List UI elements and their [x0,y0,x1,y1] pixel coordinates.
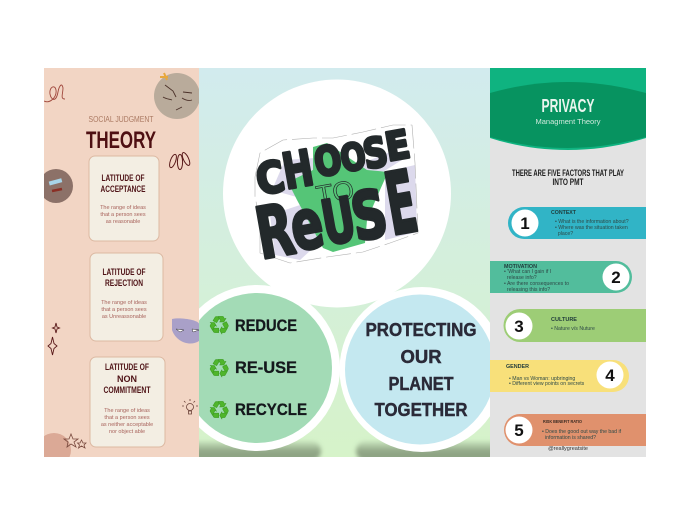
lettering: reuse: U [316,184,361,260]
factor 2: motivation: 2 [611,268,621,287]
lettering: choose: S [359,127,391,179]
factor 1: context: • What is the information about? [555,219,629,225]
row: reduce: REDUCE [235,316,297,335]
panel: center [199,68,490,457]
factor 5: risk benefit ratio [504,414,646,446]
card: latitude of acceptance: The range of ideas [100,205,146,211]
circle: protecting our planet together: OUR [400,346,442,367]
lettering: reuse: E [378,152,424,256]
icon: pink face and stars [44,433,87,457]
lettering: reuse: e [284,183,329,268]
lettering: choose: C [252,152,288,206]
icon: leaves [168,152,191,170]
intro text [512,170,624,185]
row: recycle: RECYCLE [235,400,307,419]
factor 4: gender [490,360,629,392]
shadows under circles [199,440,490,457]
row: recycle [210,401,307,420]
intro text: INTO PMT [552,177,584,187]
lettering: choose: O [311,137,345,187]
factor 4: gender: GENDER [506,364,529,370]
row: re-use: RE-USE [235,358,297,377]
icon: purple face [172,318,199,344]
panel: privacy management theory [490,68,646,457]
card: latitude of non commitment: The range of ideas [104,408,150,414]
card: latitude of non commitment: NON [117,374,137,384]
factor 2: motivation: • Are there consequences to [504,281,569,287]
header band [490,68,646,150]
factor 1: context: place? [555,231,573,237]
lettering: choose: O [337,134,369,181]
lavender blob [270,150,417,260]
factor 2: motivation: MOTIVATION [504,264,537,270]
factor 1: context [508,207,646,239]
card: latitude of non commitment: LATITUDE OF [105,362,149,372]
lettering: reuse: R [250,188,300,276]
card: latitude of acceptance: as reasonable [106,219,140,225]
circle: protecting our planet together [340,287,504,452]
intro text: THERE ARE FIVE FACTORS THAT PLAY [512,168,624,178]
card: latitude of rejection: LATITUDE OF [102,267,146,277]
factor 2: motivation: releasing this info? [504,287,550,293]
factor 5: risk benefit ratio: • Does the good out way the bad if [542,429,622,435]
row: recycle: ♻ [208,396,230,425]
card: latitude of acceptance: LATITUDE OF [102,173,145,183]
heading: theory: THEORY [86,127,156,154]
green blob [288,143,388,252]
factor 1: context: • Where was the situation taken [555,225,628,231]
circle: protecting our planet together: PROTECTING [366,319,476,340]
factor 4: gender: • Different view points on secrets [509,381,585,387]
subheading: Managment Theory [536,117,601,126]
handle: @reallygreatsite [548,446,588,452]
factor 2: motivation: • 'What can I gain if I [504,269,551,275]
factor 5: risk benefit ratio: information is shared? [545,435,596,441]
card: latitude of rejection: The range of ideas [101,300,147,306]
factor 3: culture: • Nature v/s Nuture [551,326,595,332]
lettering: choose: H [278,139,318,201]
card: latitude of non commitment: nor object able [109,429,145,435]
factor 4: gender: • Man vs Woman: upbringing [509,376,575,382]
factor 2: motivation: release info? [504,275,537,281]
card: latitude of non commitment: as neither acceptable [101,422,153,428]
card: latitude of rejection [90,253,163,341]
row: reduce: ♻ [208,311,230,340]
card: latitude of rejection: REJECTION [105,278,143,288]
card: latitude of non commitment [90,357,165,447]
lettering: choose [256,128,410,194]
lettering: choose: E [382,122,413,171]
row: re-use [210,359,296,378]
card: latitude of acceptance: ACCEPTANCE [100,184,146,194]
card: latitude of non commitment: COMMITMENT [104,385,151,395]
icon: bandaged face [44,169,73,203]
factor 4: gender: 4 [605,366,615,385]
icon: light bulb [182,399,198,414]
factor 5: risk benefit ratio: 5 [514,421,524,440]
circle: reduce reuse recycle [199,285,340,451]
card: latitude of rejection: as Unreassonable [102,314,146,320]
icon: beige face [154,73,200,119]
card: latitude of acceptance [89,156,159,241]
card: latitude of non commitment: that a person sees [104,415,150,421]
row: re-use: ♻ [208,354,230,383]
factor 3: culture: 3 [514,317,524,336]
factor 2: motivation [490,261,632,293]
dashed sticker outline [255,125,418,263]
factor 1: context: 1 [520,214,530,233]
factor 3: culture [504,309,646,342]
lettering: reuse [255,167,418,260]
decoration: squiggle [44,85,65,102]
lettering: reuse: S [345,175,393,257]
row: reduce [210,316,297,334]
card: latitude of rejection: that a person sees [101,307,147,313]
circle: protecting our planet together: TOGETHER [374,399,468,420]
card: latitude of acceptance: that a person sees [100,212,146,218]
icon: sparkles [48,323,60,355]
factor 1: context: CONTEXT [551,210,577,216]
factor 5: risk benefit ratio: RISK BENEFIT RATIO [543,419,582,425]
heading: social judgment: SOCIAL JUDGMENT [88,115,154,124]
circle: protecting our planet together: PLANET [388,373,454,394]
factor 3: culture: CULTURE [551,317,577,323]
heading: privacy: PRIVACY [542,96,594,116]
lettering: to: TO [314,175,356,211]
panel: social judgment theory [37,68,200,467]
circle: choose to reuse [223,80,451,308]
